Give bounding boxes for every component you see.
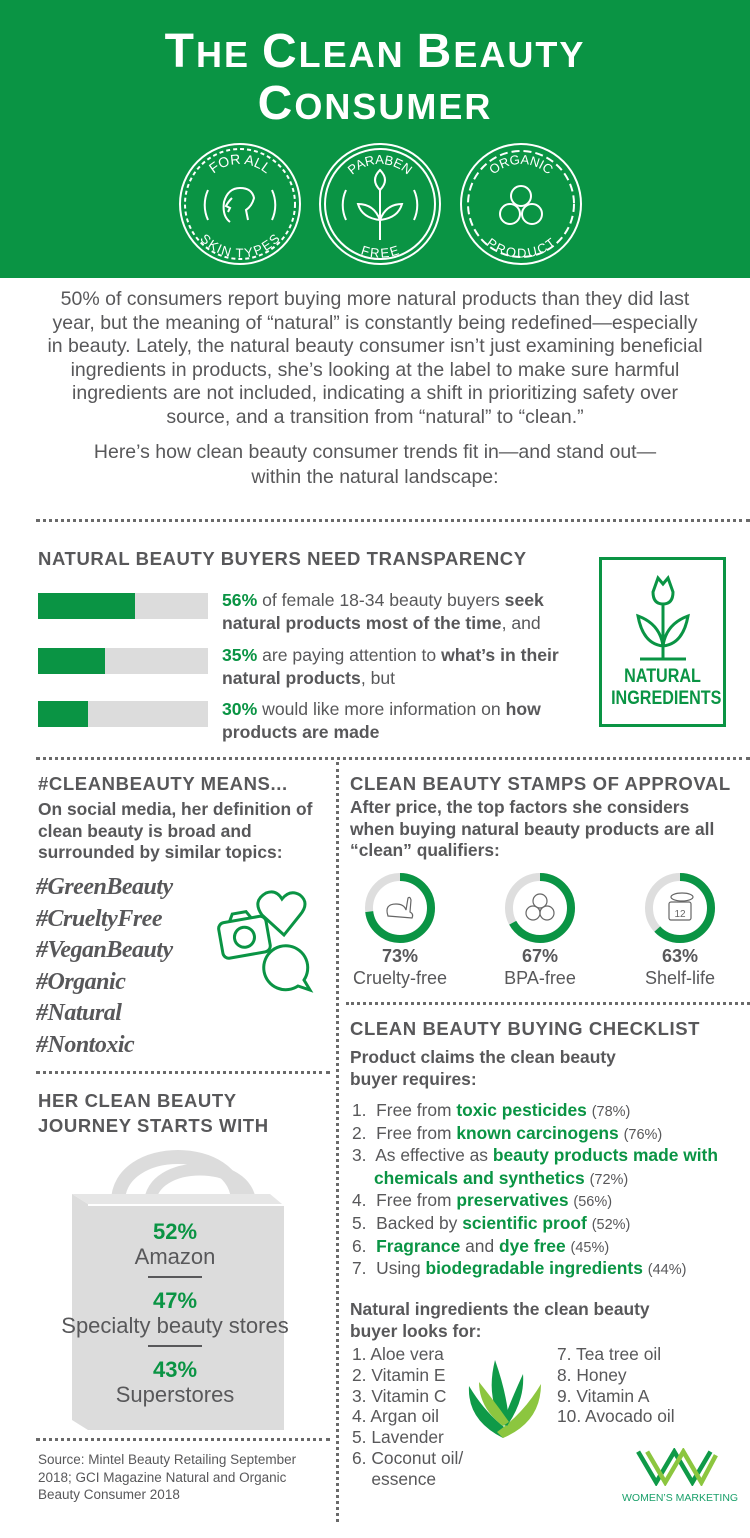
intro lead-in: within the natural landscape: [251, 466, 499, 488]
labels: 73% [382, 946, 418, 966]
hashtags: #GreenBeauty [36, 874, 173, 900]
title: THE CLEAN BEAUTY [165, 25, 585, 78]
description: After price, the top factors she considers when buying natural beauty products are all “clean” qualifiers: [350, 797, 714, 860]
icon: tulip [636, 575, 690, 660]
list col 1 [352, 1344, 464, 1489]
stat: specialty: 47% [153, 1288, 197, 1313]
stat: Amazon [134, 1219, 215, 1268]
intro paragraph: ingredients in products, she’s looking at the label to make sure harmful [71, 358, 679, 380]
bar 30% [38, 701, 208, 727]
list col 1: 2. Vitamin E [352, 1365, 445, 1385]
list col 1: 1. Aloe vera [352, 1344, 444, 1364]
donut 63% [649, 877, 711, 939]
list col 1: 3. Vitamin C [352, 1386, 446, 1406]
badge: organic product: ORGANIC [490, 155, 553, 174]
section: transparency [38, 548, 726, 742]
section: stamps of approval: 63% [662, 946, 698, 966]
checklist items: 1. Free from toxic pesticides (78%) [352, 1100, 630, 1120]
section: natural ingredients list [350, 1299, 675, 1489]
intro lead-in [94, 441, 656, 488]
list col 2: 7. Tea tree oil [557, 1344, 661, 1364]
icons: social [217, 890, 314, 993]
section: stamps of approval: 67% [522, 946, 558, 966]
icon: aloe [468, 1360, 541, 1438]
intro paragraph: 50% of consumers report buying more natural products than they did last [61, 288, 689, 310]
stat text 1: 56% of female 18-34 beauty buyers seek natural products most of the time, and [222, 590, 544, 633]
checklist items: 6. Fragrance and dye free (45%) [352, 1236, 609, 1256]
badge: organic product [460, 143, 582, 265]
hashtags: #Natural [36, 1000, 121, 1026]
stat: specialty: Specialty beauty stores [61, 1312, 289, 1338]
source: Source: Mintel Beauty Retailing September 2018; GCI Magazine Natural and Organic Beauty Consumer 2018 [38, 1452, 296, 1502]
list col 1: 5. Lavender [352, 1427, 444, 1447]
badges [179, 143, 582, 265]
description: Product claims the clean beauty buyer requires: [350, 1047, 616, 1089]
checklist items: 4. Free from preservatives (56%) [352, 1190, 612, 1210]
heading [38, 1090, 269, 1136]
hashtags: #CrueltyFree [36, 906, 162, 932]
stat text 2: 35% are paying attention to what’s in their natural products, but [222, 645, 559, 688]
intro lead-in: Here’s how clean beauty consumer trends fit in—and stand out— [94, 441, 656, 463]
intro paragraph [47, 288, 703, 428]
header band [0, 0, 750, 278]
badge: for all skin types: SKIN TYPES [200, 234, 279, 258]
badge: paraben free: FREE [361, 246, 400, 258]
list col 1: 4. Argan oil [352, 1406, 439, 1426]
list col 1: essence [371, 1469, 436, 1489]
list col 1: 6. Coconut oil/ [352, 1448, 463, 1468]
box text [611, 666, 721, 709]
heading: HER CLEAN BEAUTY [38, 1090, 237, 1111]
donut 63%: 12 [674, 909, 686, 920]
stats in bag [61, 1219, 289, 1406]
section: #cleanbeauty [36, 773, 314, 1058]
heading: CLEAN BEAUTY BUYING CHECKLIST [350, 1018, 700, 1039]
heading: CLEAN BEAUTY STAMPS OF APPROVAL [350, 773, 731, 794]
section: stamps of approval: BPA-free [504, 968, 576, 988]
stat: Amazon: 52% [153, 1219, 197, 1244]
stat text 3: 30% would like more information on how products are made [222, 699, 541, 742]
box text: INGREDIENTS [611, 688, 721, 709]
checklist items [352, 1100, 718, 1278]
donut 67% [509, 877, 571, 939]
stat: superstores [116, 1357, 234, 1406]
badge: for all skin types: FOR ALL [208, 154, 268, 174]
icon: shopping bag [72, 1150, 284, 1430]
donut 73% [369, 877, 431, 939]
badge: for all skin types [179, 143, 301, 265]
badge: paraben free [319, 143, 441, 265]
intro paragraph: year, but the meaning of “natural” is constantly being redefined—especially [53, 312, 697, 334]
list col 2 [557, 1344, 675, 1426]
hashtags: #Nontoxic [36, 1032, 134, 1058]
heading: NATURAL BEAUTY BUYERS NEED TRANSPARENCY [38, 548, 527, 569]
natural ingredients box [599, 557, 726, 727]
donut charts [365, 873, 715, 943]
title [165, 25, 585, 130]
heading: #CLEANBEAUTY MEANS... [38, 773, 288, 794]
section: stamps of approval: Shelf-life [645, 968, 715, 988]
labels [353, 946, 447, 988]
stat: superstores: Superstores [116, 1382, 234, 1406]
section: journey [38, 1090, 289, 1430]
intro paragraph: ingredients are not included, indicating a shift in prioritizing safety over [72, 382, 678, 404]
checklist items: 2. Free from known carcinogens (76%) [352, 1123, 662, 1143]
bar 35% [38, 648, 208, 674]
intro paragraph: source, and a transition from “natural” to “clean.” [166, 406, 584, 428]
badge: paraben free: PARABEN [348, 155, 412, 174]
logo: women's marketing: WOMEN’S MARKETING [622, 1492, 738, 1504]
list col 2: 10. Avocado oil [557, 1406, 675, 1426]
bar 56% [38, 593, 208, 619]
hashtags: #Organic [36, 968, 125, 994]
list col 2: 9. Vitamin A [557, 1386, 649, 1406]
list col 2: 8. Honey [557, 1365, 627, 1385]
checklist items: 7. Using biodegradable ingredients (44%) [352, 1258, 686, 1278]
badge: organic product: PRODUCT [486, 238, 553, 258]
labels: Cruelty-free [353, 968, 447, 988]
hashtags: #VeganBeauty [36, 937, 173, 963]
heading: JOURNEY STARTS WITH [38, 1115, 269, 1136]
stat: superstores: 43% [153, 1357, 197, 1382]
checklist items: 3. As effective as beauty products made with chemicals and synthetics (72%) [352, 1145, 718, 1188]
description: Natural ingredients the clean beauty buyer looks for: [350, 1299, 650, 1341]
intro paragraph: in beauty. Lately, the natural beauty consumer isn’t just examining beneficial [47, 335, 703, 357]
description: On social media, her definition of clean beauty is broad and surrounded by similar topics: [38, 799, 312, 862]
section: stamps of approval [350, 773, 731, 988]
stat: Amazon: Amazon [135, 1244, 215, 1268]
hashtags [36, 874, 174, 1058]
title: CONSUMER [258, 77, 492, 130]
section: checklist [350, 1018, 718, 1278]
box text: NATURAL [624, 666, 701, 687]
stat: specialty [61, 1288, 289, 1338]
checklist items: 5. Backed by scientific proof (52%) [352, 1213, 630, 1233]
logo: women's marketing [622, 1448, 738, 1504]
